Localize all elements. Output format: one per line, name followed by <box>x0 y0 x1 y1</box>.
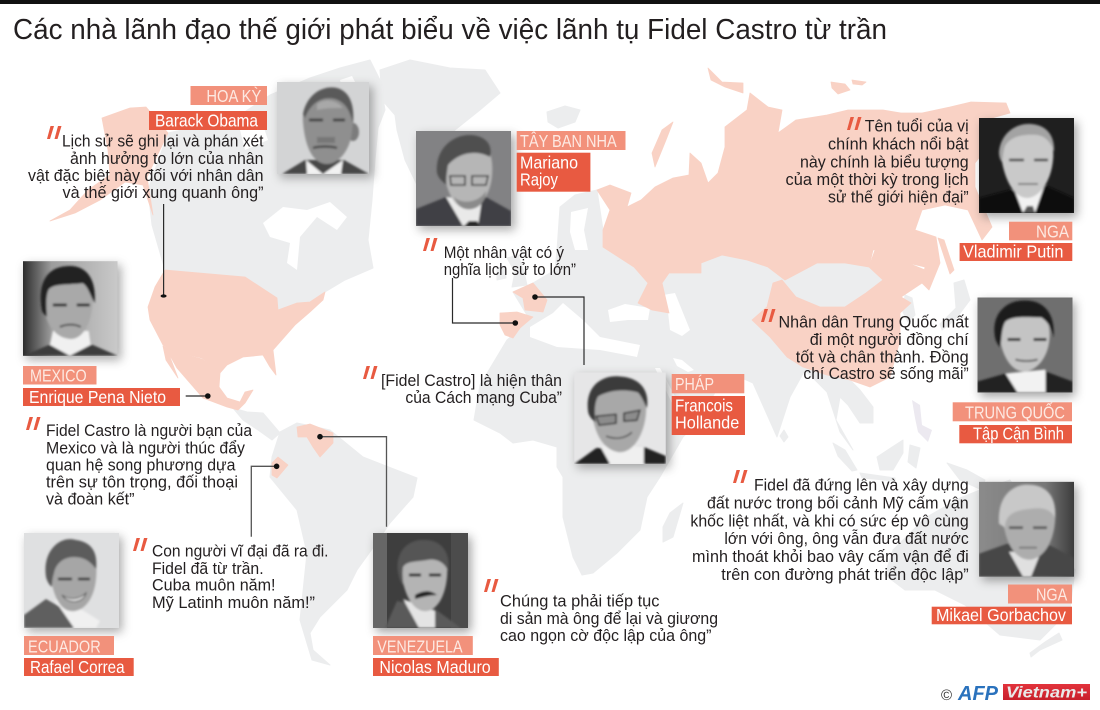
country label: Nga: NGA <box>1036 584 1068 604</box>
map: grey land <box>148 60 1075 665</box>
country: Spain <box>500 312 533 338</box>
quote text: Putin: sử thế giới hiện đại” <box>828 189 969 207</box>
quote text: Pena Nieto: quan hệ song phương dựa <box>46 456 236 474</box>
name label: Tập Cận Bình: Tập Cận Bình <box>973 424 1064 444</box>
quote text: Xi: tốt và chân thành. Đồng <box>796 348 969 366</box>
top black bar <box>0 0 1100 4</box>
country label: Venezuela: VENEZUELA <box>377 636 463 656</box>
world map <box>50 60 1075 665</box>
map: pink countries <box>50 68 1010 478</box>
name label: Enrique Pena Nieto: Enrique Pena Nieto <box>29 387 166 407</box>
connector: Mexico <box>186 393 211 399</box>
panel: Mariano Rajoy <box>416 131 626 326</box>
map: seas and lakes <box>240 76 694 428</box>
quote text: Obama: ảnh hưởng to lớn của nhân <box>70 150 264 168</box>
quote mark <box>47 126 62 139</box>
name label: Nicolas Maduro: Nicolas Maduro <box>379 657 491 677</box>
quote text: Hollande <box>381 372 562 407</box>
country label: Pháp <box>672 374 744 394</box>
name label: Vladimir Putin: Vladimir Putin <box>963 242 1064 262</box>
country: Ecuador <box>272 457 288 478</box>
map: philippines <box>912 400 932 442</box>
name label: Mariano Rajoy: Rajoy <box>520 169 558 189</box>
name label: Francois Hollande: Hollande <box>675 412 739 432</box>
portrait: Gorbachev <box>979 482 1077 580</box>
quote text: Xi: đi một người đồng chí <box>810 331 969 349</box>
country: China <box>752 247 925 387</box>
quote text: Hollande: của Cách mạng Cuba” <box>405 389 562 407</box>
country label: Nga <box>1008 584 1072 604</box>
quote text: Putin: này chính là biểu tượng <box>800 153 969 171</box>
title: Các nhà lãnh đạo thế giới phát biểu về việc lãnh tụ Fidel Castro từ trần <box>13 14 887 46</box>
quote mark <box>733 470 748 483</box>
portrait: Maduro <box>373 533 471 632</box>
quote text: Gorbachev: lớn với ông, ông vẫn đưa đất nước <box>724 529 969 548</box>
name label: Mikael Gorbachov: Mikael Gorbachov <box>936 605 1066 625</box>
quote text: Gorbachev: khốc liệt nhất, và khi có sức ép vô cùng <box>690 512 969 530</box>
quote text: Maduro: di sản mà ông để lại và giương <box>500 610 718 628</box>
name label: Mariano Rajoy <box>517 152 590 192</box>
connector: Venezuela <box>317 434 386 527</box>
panel: Rafael Correa <box>24 464 328 677</box>
portrait: Obama <box>277 82 373 178</box>
country label: Pháp: PHÁP <box>675 374 714 394</box>
quote text: Gorbachev: trên con đường phát triển độc lập” <box>721 566 969 584</box>
portrait: Putin <box>979 118 1077 217</box>
quote mark <box>761 309 776 322</box>
country label: Nga <box>1009 221 1072 241</box>
quote text: Correa: Mỹ Latinh muôn năm!” <box>152 594 315 612</box>
panel: Francois Hollande <box>363 294 745 468</box>
name label: Rafael Correa: Rafael Correa <box>30 657 125 677</box>
country label: Hoa Kỳ: HOA KỲ <box>206 86 262 106</box>
country label: Trung Quốc: TRUNG QUỐC <box>965 402 1065 422</box>
quote text: Putin <box>786 118 969 207</box>
panel: Mikhail Gorbachev <box>690 470 1077 625</box>
connector: Spain <box>452 278 518 326</box>
portrait: Xi <box>978 298 1075 396</box>
country label: Mexico: MEXICO <box>30 366 87 386</box>
portrait: Hollande <box>574 372 670 468</box>
quote mark <box>484 579 498 592</box>
quote text: Correa <box>152 543 328 612</box>
country: United States <box>148 270 325 375</box>
quote text: Rajoy: nghĩa lịch sử to lớn” <box>444 261 576 279</box>
country: Venezuela <box>297 424 333 457</box>
panel: Vladimir Putin <box>786 117 1077 262</box>
country label: Nga: NGA <box>1036 221 1069 241</box>
quote text: Pena Nieto: Mexico và là người thúc đẩy <box>46 439 246 457</box>
name label: Mariano Rajoy: Mariano <box>520 152 578 172</box>
panel: Barack Obama <box>28 82 373 298</box>
source logos <box>941 683 1090 705</box>
portrait: Rajoy <box>416 131 515 230</box>
quote text: Putin: chính khách nổi bật <box>828 135 969 153</box>
quote text: Obama: và thế giới xung quanh ông” <box>62 184 264 202</box>
connector: USA <box>161 204 167 298</box>
islands: arctic and Sakhalin <box>652 122 673 167</box>
quote mark <box>133 538 148 551</box>
quote text: Maduro: cao ngọn cờ độc lập của ông” <box>500 627 712 645</box>
country: Russia <box>597 93 1010 313</box>
portrait: Pena Nieto <box>23 261 121 360</box>
logo: Vietnam+: Vietnam+ <box>1006 684 1087 702</box>
quote text: Gorbachev: đất nước trong bối cảnh Mỹ cấm vận <box>707 494 969 512</box>
quote text: Gorbachev: Fidel đã đứng lên và xây dựng <box>754 476 969 494</box>
country: France <box>513 283 547 312</box>
quote text: Hollande: [Fidel Castro] là hiện thân <box>381 372 562 390</box>
name label: Barack Obama: Barack Obama <box>155 110 258 130</box>
quote text: Pena Nieto: trên sự tôn trọng, đối thoại <box>46 474 238 492</box>
quote text: Xi <box>778 314 969 383</box>
country label: Tây Ban Nha: TÂY BAN NHA <box>520 131 617 151</box>
quote text: Xi: Nhân dân Trung Quốc mất <box>778 314 969 332</box>
quote text: Correa: Fidel đã từ trần. <box>152 560 264 578</box>
panel: Enrique Pena Nieto <box>23 261 253 508</box>
country label: Ecuador: ECUADOR <box>28 636 101 656</box>
panel: Nicolas Maduro <box>317 434 718 677</box>
connector: Ecuador <box>251 464 279 537</box>
quote text: Obama: vật đặc biệt này đối với nhân dân <box>28 167 264 185</box>
name label: Francois Hollande <box>672 396 745 435</box>
connector: France <box>532 294 584 365</box>
country: Mexico <box>163 346 253 410</box>
copyright sign: © <box>941 687 952 704</box>
quote text: Rajoy <box>444 244 576 279</box>
quote mark <box>363 366 378 379</box>
quote text: Rajoy: Một nhân vật có ý <box>444 244 565 262</box>
quote text: Correa: Cuba muôn năm! <box>152 577 276 595</box>
quote mark <box>847 117 862 130</box>
quote text: Maduro <box>500 593 718 645</box>
quote text: Pena Nieto <box>46 422 253 508</box>
quote text: Maduro: Chúng ta phải tiếp tục <box>500 593 660 611</box>
quote mark <box>423 238 438 251</box>
name label: Francois Hollande: Francois <box>675 396 733 416</box>
quote mark <box>26 417 40 430</box>
quote text: Gorbachev: mình thoát khỏi bao vây cấm vận để đi <box>692 548 969 566</box>
panel: Tập Cận Bình <box>761 298 1075 444</box>
quote text: Pena Nieto: Fidel Castro là người bạn của <box>46 422 253 440</box>
quote text: Obama: Lịch sử sẽ ghi lại và phán xét <box>62 133 264 151</box>
quote text: Correa: Con người vĩ đại đã ra đi. <box>152 543 328 561</box>
quote text: Obama <box>28 133 264 202</box>
quote text: Pena Nieto: và đoàn kết” <box>46 490 134 508</box>
quote text: Putin: Tên tuổi của vị <box>865 118 969 136</box>
country: Alaska <box>50 107 168 221</box>
quote text: Gorbachev <box>690 476 969 584</box>
logo: AFP: AFP <box>957 683 999 705</box>
portrait: Correa <box>24 533 122 632</box>
quote text: Xi: chí Castro sẽ sống mãi” <box>803 365 969 383</box>
quote text: Putin: của một thời kỳ trong lịch <box>786 171 969 189</box>
